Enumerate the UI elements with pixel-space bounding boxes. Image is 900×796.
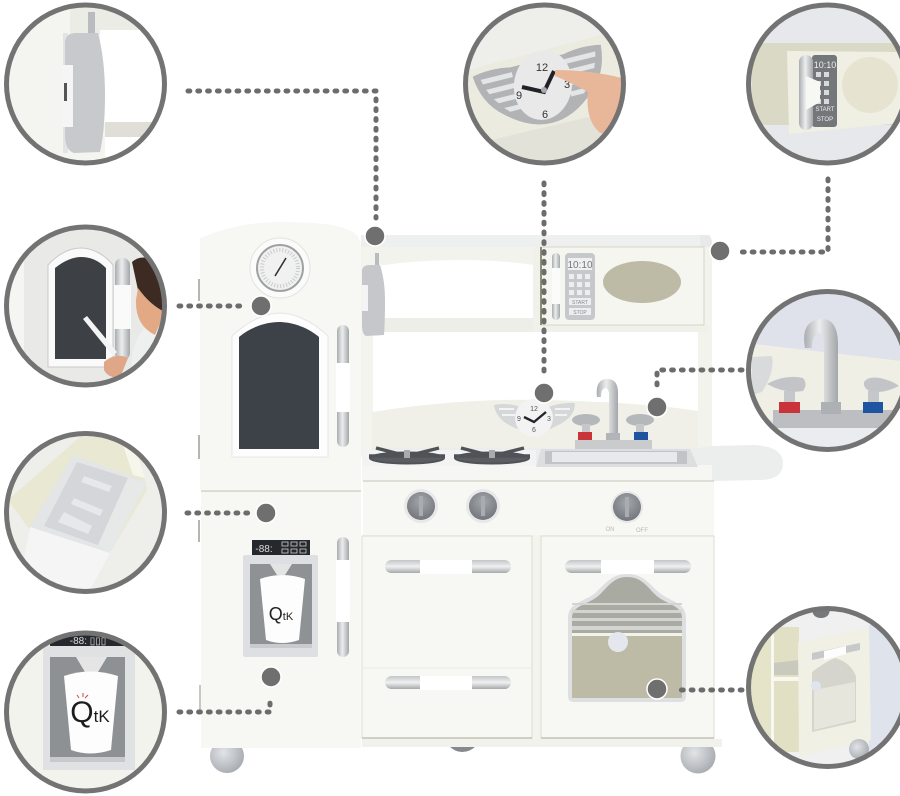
- control panel with knobs: OFF: [636, 528, 648, 534]
- microwave: STOP: [573, 310, 587, 316]
- hotspot dots: [251, 226, 730, 699]
- water dispenser: [243, 540, 318, 657]
- telephone: [362, 253, 385, 336]
- callout 1: telephone detail: [0, 0, 170, 170]
- microwave close-up: [751, 8, 900, 160]
- microwave: START: [572, 300, 588, 306]
- clock close-up: 6: [542, 109, 548, 121]
- callout 8: oven door detail: [745, 605, 900, 775]
- dotted leader lines: [179, 91, 828, 712]
- microwave close-up: START: [815, 107, 835, 113]
- faucet close-up: [751, 294, 900, 447]
- water dispenser: QtK: [269, 604, 294, 624]
- thermometer gauge: [250, 238, 310, 298]
- wall clock: 3: [547, 416, 551, 423]
- play kitchen illustration: [198, 222, 783, 774]
- callout 6: microwave detail: [745, 0, 900, 170]
- backsplash: [372, 400, 698, 450]
- oven window: [568, 574, 686, 702]
- lower cabinet doors: [362, 535, 722, 747]
- chalkboard: [232, 313, 328, 457]
- clock close-up: 12: [536, 62, 548, 74]
- callout 3: ice tray drawer detail: [0, 430, 170, 600]
- callout 7: faucet detail: [745, 285, 900, 455]
- sink: [536, 449, 698, 467]
- microwave: 10:10: [567, 260, 593, 271]
- microwave close-up: 10:10: [814, 60, 836, 70]
- gas burners: [369, 448, 530, 464]
- control panel with knobs: [363, 482, 714, 536]
- wall clock: [494, 399, 575, 437]
- feet: [210, 738, 716, 774]
- clock close-up: 3: [564, 79, 570, 91]
- drawer close-up: [9, 436, 162, 589]
- callout 2: chalkboard detail: [0, 220, 170, 390]
- faucet and taps: [572, 379, 654, 449]
- countertop: [362, 445, 783, 482]
- telephone close-up: [9, 8, 152, 160]
- dispenser close-up: QtK: [70, 696, 110, 729]
- dispenser close-up: -88: ▯▯▯: [70, 636, 106, 647]
- fridge column back and shelf unit: [361, 235, 712, 457]
- water dispenser: -88:: [255, 544, 273, 555]
- callout 5: wall clock detail: [460, 0, 630, 170]
- upper fridge door: [198, 222, 361, 490]
- dispenser close-up: [9, 636, 162, 788]
- microwave close-up: STOP: [817, 117, 833, 123]
- lower fridge door: [198, 491, 361, 748]
- callout 4: water dispenser cup detail: [0, 630, 170, 795]
- drawer and oven handles: [385, 560, 691, 690]
- microwave: [540, 247, 704, 325]
- wall clock: 6: [532, 427, 536, 434]
- control panel with knobs: ON: [606, 527, 614, 533]
- clock close-up: [468, 8, 621, 160]
- clock close-up: 9: [516, 90, 522, 102]
- open oven door close-up: [751, 611, 900, 764]
- wall clock: 9: [517, 416, 521, 423]
- chalkboard close-up: [9, 230, 162, 382]
- upper fridge handle: [336, 325, 350, 447]
- lower fridge handle: [336, 537, 350, 657]
- wall clock: 12: [530, 406, 538, 413]
